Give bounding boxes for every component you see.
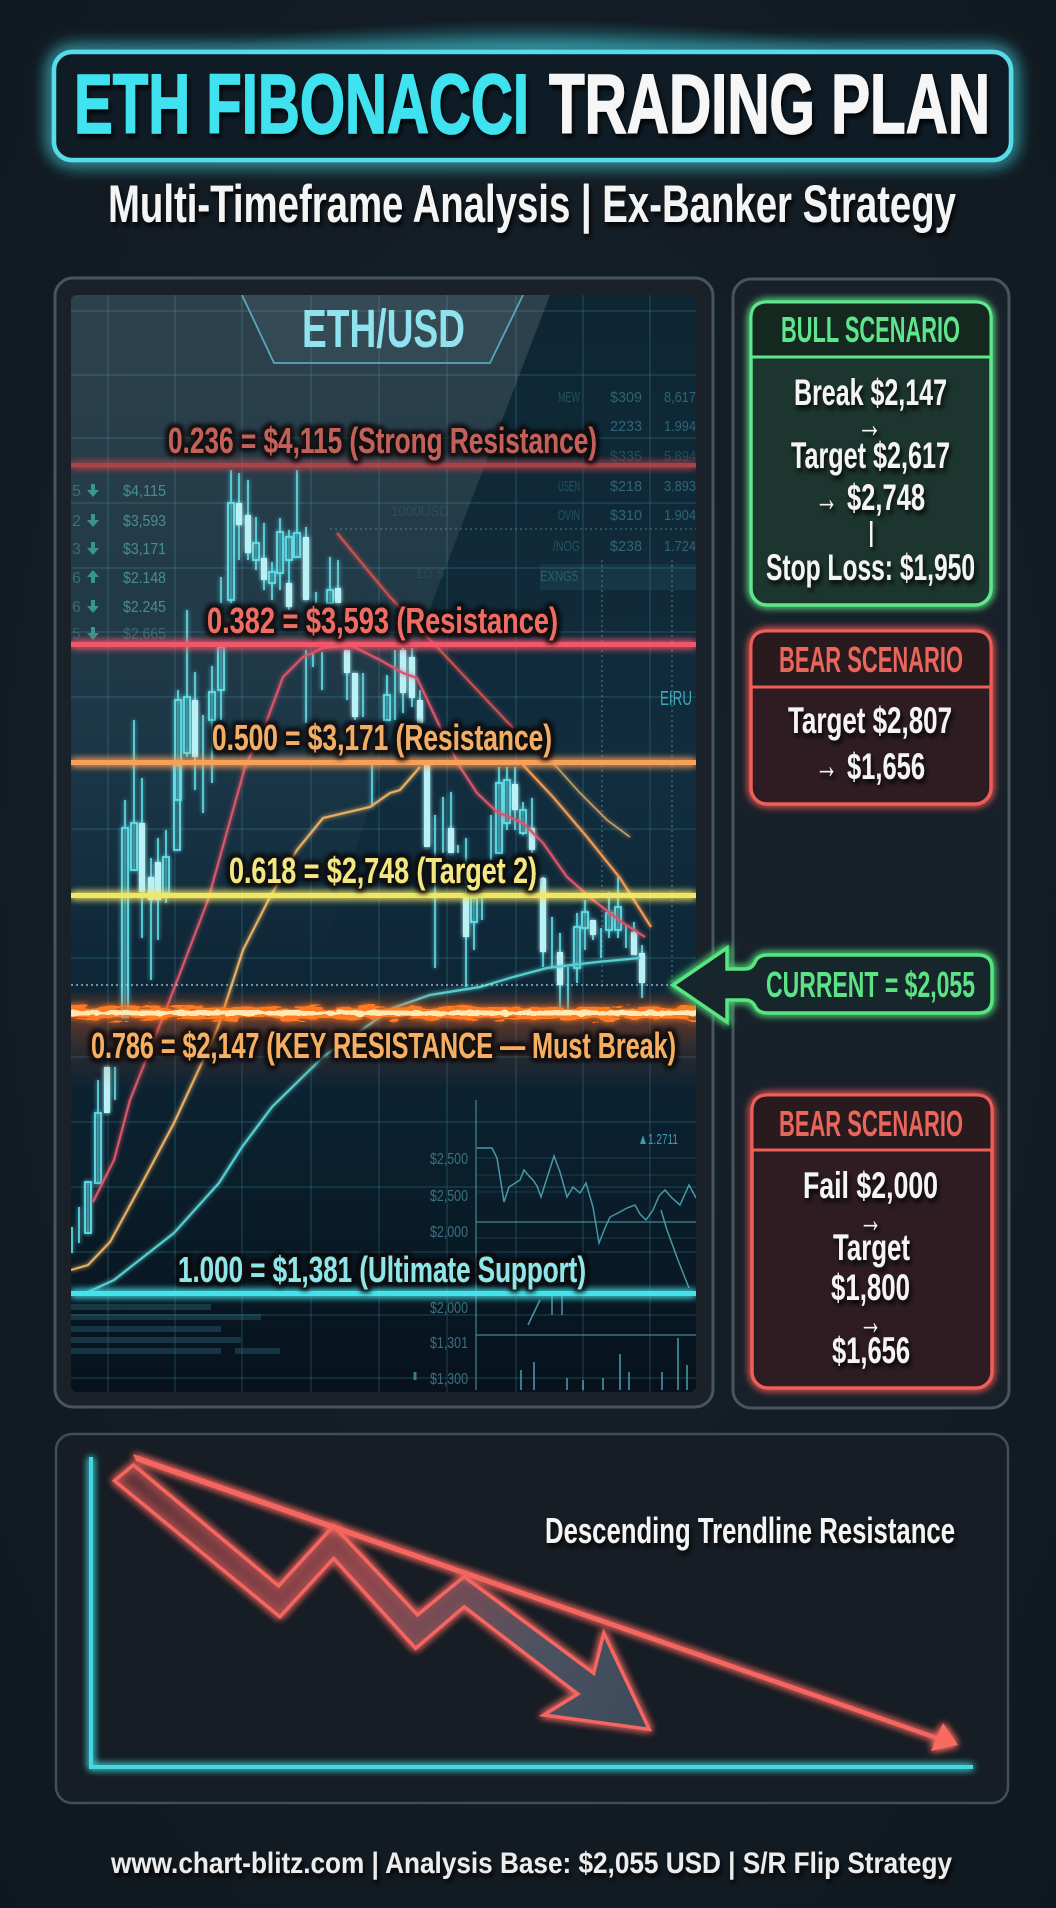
bear scenario card 1 [751, 631, 991, 804]
right price table: $218 [610, 478, 642, 495]
left price table: 6 [72, 599, 81, 616]
bear scenario card 2: $1,800 [831, 1267, 910, 1308]
bull scenario card: $2,748 [847, 477, 925, 518]
right price table: 1.994 [664, 418, 696, 435]
fib labels: 0.786 = $2,147 (KEY RESISTANCE — Must Break) [91, 1025, 676, 1066]
panel: scenarios sidebar [733, 279, 1009, 1408]
right price table: OVIN [558, 507, 580, 524]
current price dotted line [71, 984, 672, 986]
fib line 0.236 [71, 463, 696, 468]
lower-right mini chart: $2,000 [430, 1224, 468, 1241]
lower-left data rows [71, 1304, 280, 1354]
bull scenario card: → [815, 478, 838, 520]
bear scenario card 1: $1,656 [847, 746, 925, 787]
title text: ETH FIBONACCI [74, 57, 529, 151]
lower-right mini chart: $1,301 [430, 1335, 468, 1352]
fib labels: 0.236 = $4,115 (Strong Resistance) [168, 420, 597, 461]
right price table: USEN [558, 478, 580, 495]
left price table: $2.245 [123, 599, 166, 616]
left price table: 3 [72, 541, 81, 558]
left price table: $2,665 [123, 626, 166, 643]
bear scenario card 2: → [859, 1199, 882, 1241]
left price table: $4,115 [123, 483, 166, 500]
right price table: 1.724 [664, 538, 696, 555]
left price table: 5 [72, 626, 81, 643]
candlestick solid bodies [104, 503, 645, 1113]
left price table: $2.148 [123, 570, 166, 587]
left price table: 6 [72, 570, 81, 587]
bear scenario card 1: Target $2,807 [788, 700, 952, 741]
lower-right mini chart [415, 1100, 696, 1390]
lower-right mini chart: $2,500 [430, 1188, 468, 1205]
right price table: 8,617 [664, 389, 696, 406]
right price table: $335 [610, 448, 642, 465]
ETH/USD badge [242, 295, 523, 363]
candlestick wicks [72, 470, 642, 1253]
left price table [72, 483, 166, 643]
right price table: $238 [610, 538, 642, 555]
bear scenario card 1: → [815, 745, 838, 787]
fib line 0.382 [71, 642, 696, 647]
bear scenario card 2 [752, 1095, 992, 1388]
right price table: $309 [610, 389, 642, 406]
bull scenario card: Break $2,147 [794, 372, 947, 413]
left price table: $3,171 [123, 541, 166, 558]
right price table: 3.893 [664, 478, 696, 495]
right price table: 5.894 [664, 448, 696, 465]
ETH/USD badge: ETH/USD [302, 299, 465, 359]
right price table: 2233 [610, 418, 642, 435]
fib line 0.500 [71, 760, 696, 765]
bull scenario card: → [857, 404, 882, 446]
left price table: $3,593 [123, 513, 166, 530]
bear scenario card 2: Target [833, 1227, 910, 1268]
fib labels: 0.382 = $3,593 (Resistance) [207, 600, 558, 641]
panel: descending trendline diagram [56, 1434, 1008, 1803]
trendline with arrowhead [133, 1454, 958, 1751]
moving average lines [71, 533, 651, 1292]
right price table: $310 [610, 507, 642, 524]
bear scenario card 2: $1,656 [832, 1330, 910, 1371]
lower-right mini chart: ▲1.2711 [638, 1131, 678, 1148]
right price table: 1000USD [391, 503, 449, 520]
fib line 0.618 [71, 893, 696, 898]
chart grid [71, 295, 696, 1392]
lower-right mini chart: $1,300 [430, 1371, 468, 1388]
current price arrow callout [673, 948, 992, 1022]
lower-right mini chart: $2,000 [430, 1300, 468, 1317]
right price table: 10.5 [415, 566, 445, 581]
fib labels: 0.500 = $3,171 (Resistance) [212, 717, 552, 758]
lower-right mini chart: $2,500 [430, 1151, 468, 1168]
fib labels: 0.618 = $2,748 (Target 2) [229, 850, 537, 891]
glass reflection [71, 295, 550, 790]
right price table [330, 389, 696, 990]
right price table: MEW [558, 389, 580, 406]
fib line 1.000 [71, 1291, 696, 1296]
bear scenario card 2: → [859, 1301, 882, 1343]
panel: ETH/USD Fibonacci price chart [55, 278, 713, 1407]
title banner [54, 20, 1011, 160]
small label EIRU: EIRU [660, 688, 692, 710]
bull scenario card [751, 302, 991, 605]
left price table: 2 [72, 513, 81, 530]
chart axes [91, 1457, 973, 1767]
bear scenario card 2: Fail $2,000 [803, 1165, 938, 1206]
right price table: 1.904 [664, 507, 696, 524]
left price table: 5 [72, 483, 81, 500]
fib labels: 1.000 = $1,381 (Ultimate Support) [178, 1249, 586, 1290]
candlestick hollow bodies [85, 503, 621, 1233]
fire glow band [71, 990, 696, 1090]
fib line 0.786 fire [60, 1007, 710, 1019]
right price table: /NOG [553, 538, 580, 555]
zigzag down arrow [114, 1465, 649, 1729]
fib labels [91, 420, 676, 1290]
footer: www.chart-blitz.com | Analysis Base: $2,055 USD | S/R Flip Strategy [110, 1847, 952, 1880]
right price table: EXNG5 [540, 568, 578, 585]
bull scenario card: Target $2,617 [791, 435, 950, 476]
